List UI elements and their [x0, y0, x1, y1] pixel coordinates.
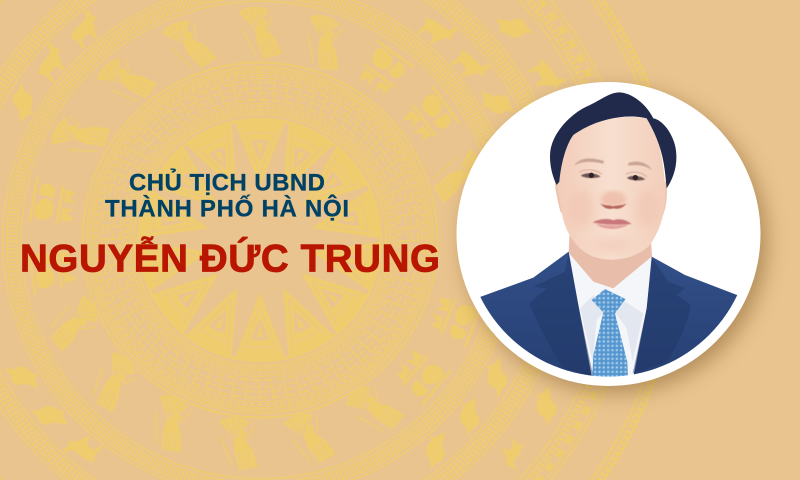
collar shadow: [580, 295, 643, 362]
meander band outer bars: [101, 81, 419, 399]
ears: [555, 173, 667, 214]
portrait circle: [456, 82, 760, 386]
birds and deer band: [3, 6, 569, 472]
suit left: [480, 252, 592, 376]
dancing figures band: [28, 7, 489, 472]
neck: [568, 235, 652, 288]
mouth: [593, 219, 632, 229]
face: [557, 117, 665, 260]
tie knot: [592, 289, 626, 314]
brows: [574, 158, 652, 170]
nose: [600, 191, 627, 209]
portrait shadow: [463, 89, 767, 393]
tie blade: [592, 312, 628, 380]
drum ring beads: [94, 0, 598, 480]
bronze drum motifs: [3, 6, 569, 472]
position line 1: CHỦ TỊCH UBND: [129, 168, 325, 197]
meander band stems: [101, 81, 419, 399]
portrait of man in suit: [480, 92, 738, 377]
position line 2: THÀNH PHỐ HÀ NỘI: [105, 195, 349, 223]
suit right: [634, 256, 738, 374]
lapels: [529, 253, 691, 377]
shirt: [568, 252, 652, 380]
title: name: NGUYỄN ĐỨC TRUNG: [20, 237, 440, 281]
hair: [550, 92, 676, 188]
title: position: [105, 168, 349, 223]
star rays: [137, 120, 383, 360]
meander band inner bars: [112, 92, 408, 388]
cheeks and shading: [569, 190, 658, 252]
eyes: [579, 170, 647, 180]
